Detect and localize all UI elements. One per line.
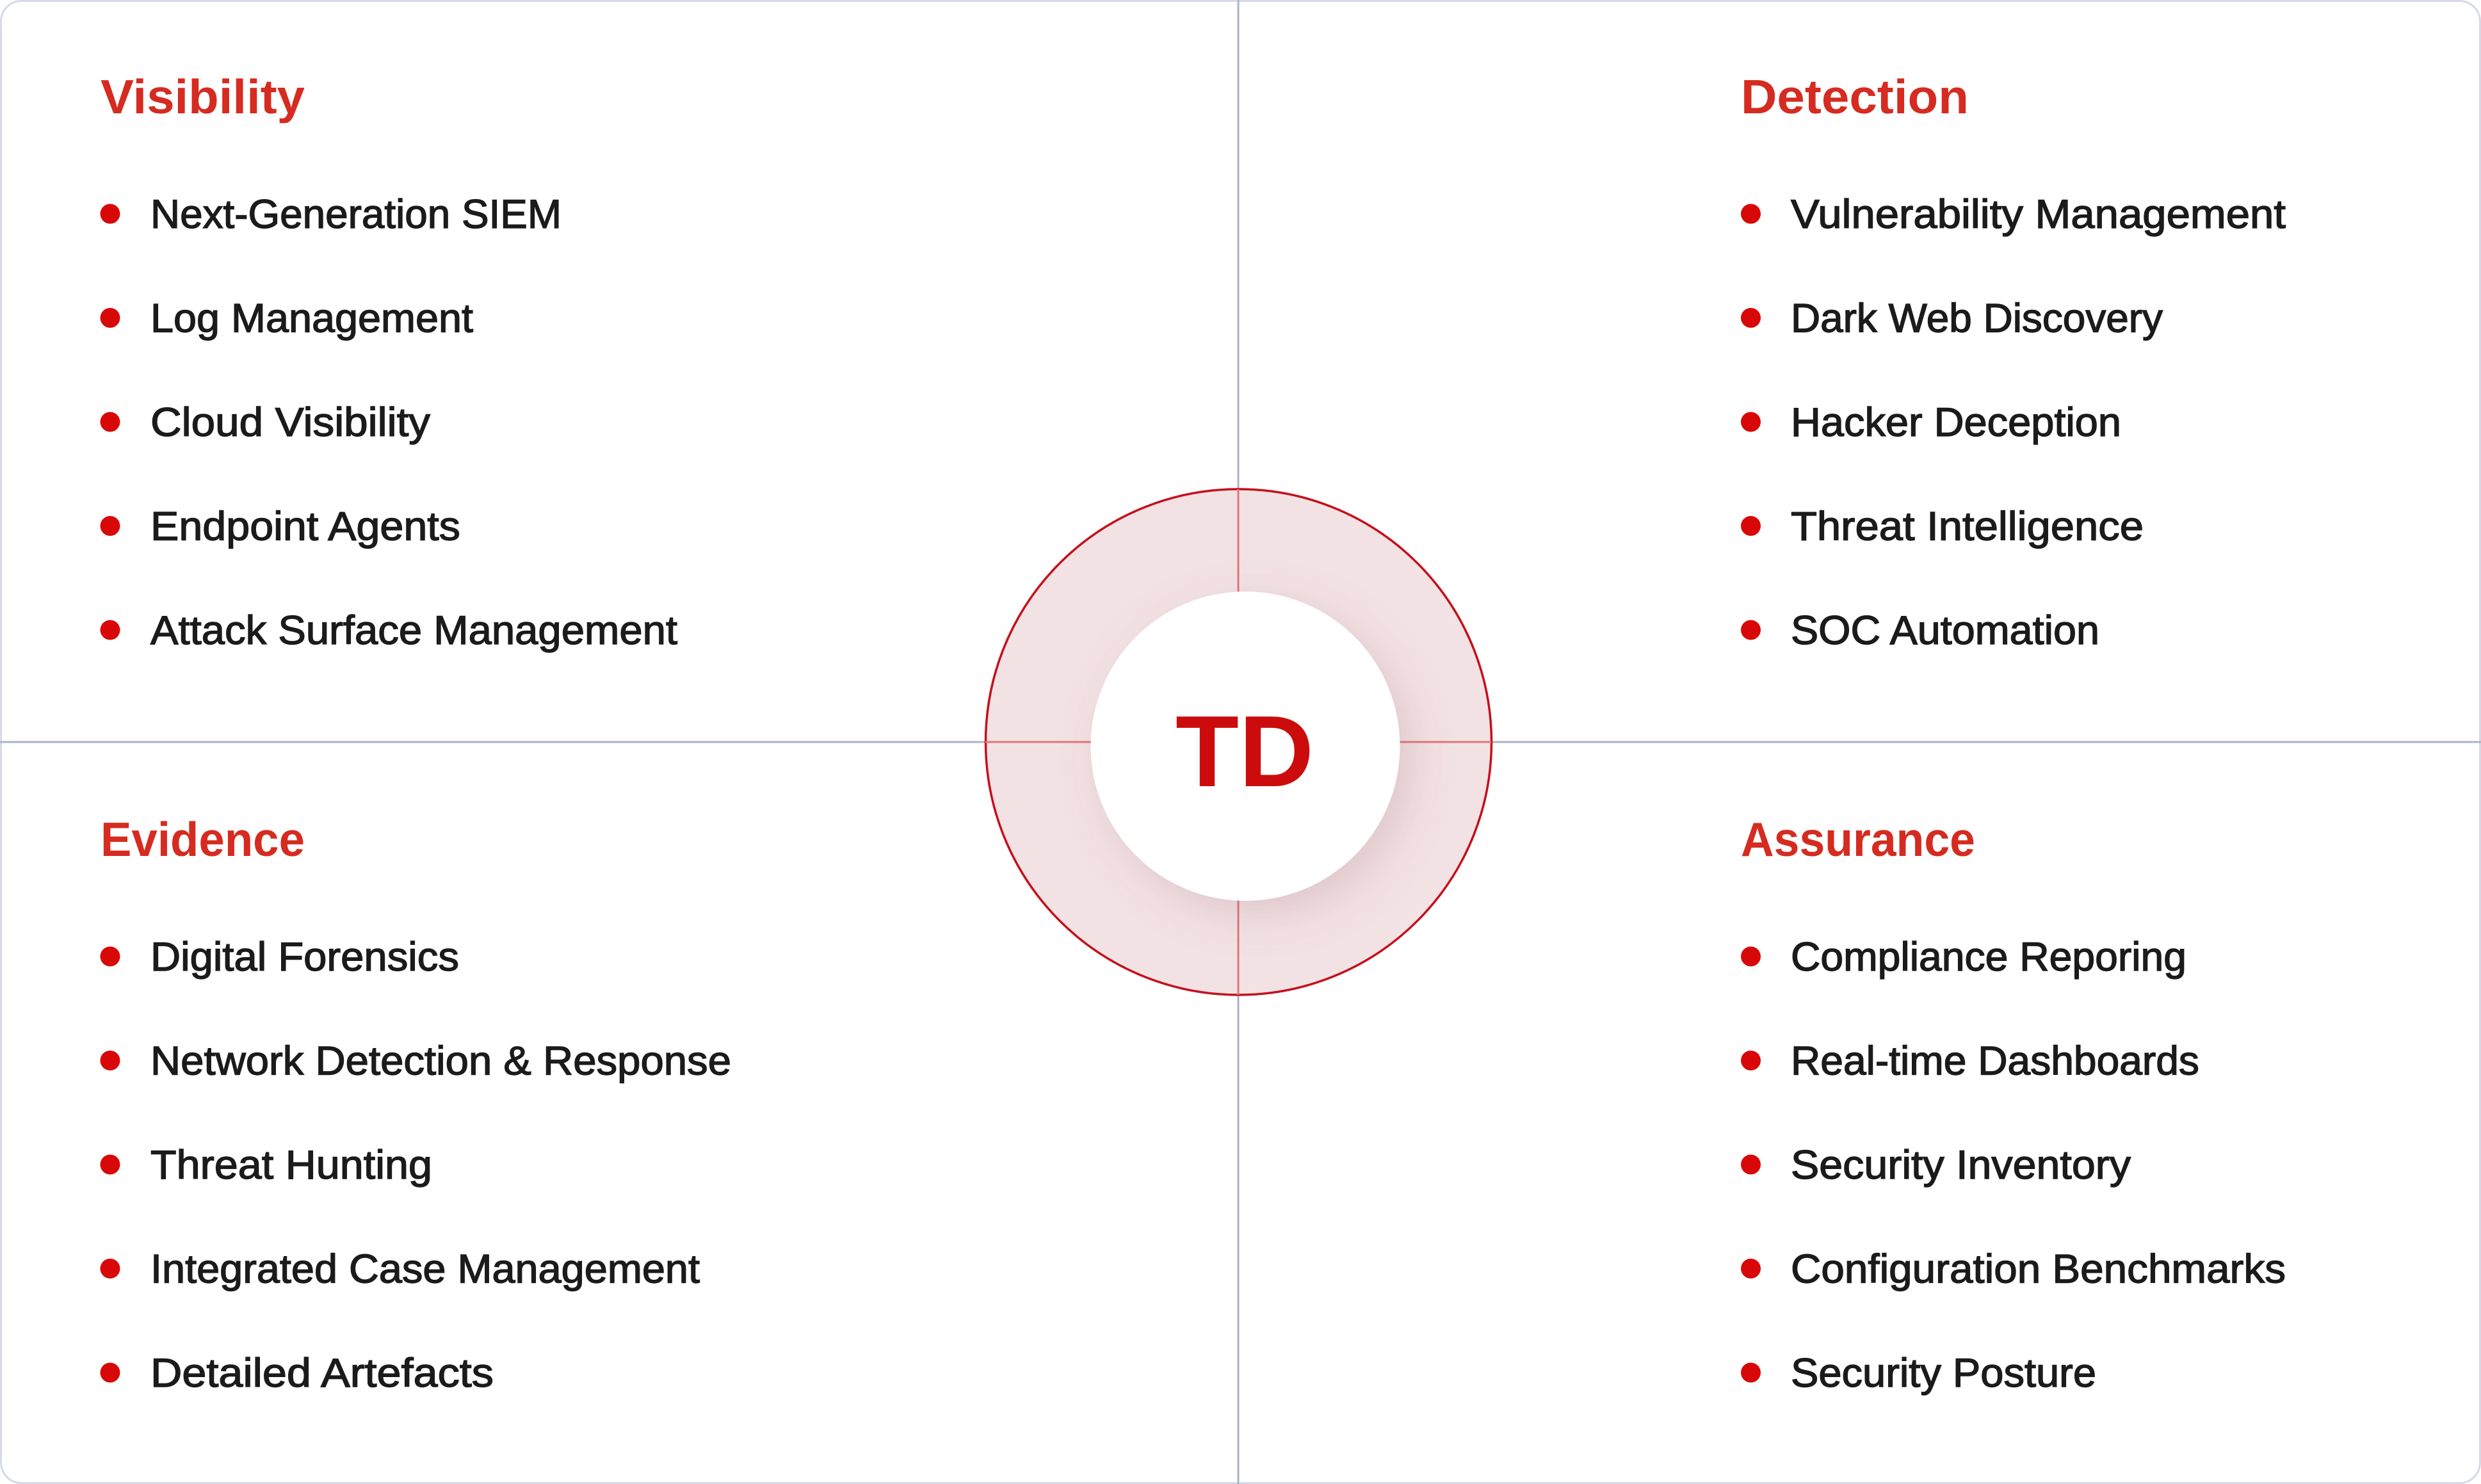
panel: assurance bbox=[1741, 812, 2286, 1396]
item: integrated case management: Integrated Case Management bbox=[150, 1247, 700, 1292]
item: attack surface management: Attack Surface Management bbox=[150, 608, 678, 653]
item: security posture: Security Posture bbox=[1791, 1351, 2096, 1396]
item: compliance reporing: Compliance Reporing bbox=[1791, 935, 2186, 980]
item: hacker deception: Hacker Deception bbox=[1791, 400, 2121, 445]
item: security inventory: Security Inventory bbox=[1791, 1143, 2131, 1188]
item: dark web discovery: Dark Web Discovery bbox=[1791, 296, 2163, 341]
item: vulnerability management: Vulnerability Management bbox=[1791, 192, 2286, 237]
item: threat intelligence: Threat Intelligence bbox=[1791, 504, 2144, 549]
item: real-time dashboards: Real-time Dashboards bbox=[1791, 1038, 2199, 1083]
item: detailed artefacts: Detailed Artefacts bbox=[150, 1351, 494, 1396]
ring crosshair bbox=[985, 489, 1491, 995]
heading: visibility: Visibility bbox=[101, 70, 305, 124]
item: network detection and response: Network Detection & Response bbox=[150, 1038, 731, 1083]
item: next-generation siem: Next-Generation SIEM bbox=[150, 192, 562, 237]
outer ring bbox=[986, 489, 1492, 995]
heading: evidence: Evidence bbox=[101, 812, 305, 866]
panel: visibility bbox=[100, 70, 678, 653]
item: threat hunting: Threat Hunting bbox=[150, 1143, 432, 1188]
item: endpoint agents: Endpoint Agents bbox=[150, 504, 460, 549]
item: digital forensics: Digital Forensics bbox=[150, 935, 459, 980]
item: log management: Log Management bbox=[150, 296, 474, 341]
center emblem bbox=[985, 489, 1492, 995]
panel: detection bbox=[1741, 70, 2286, 653]
item: cloud visibility: Cloud Visibility bbox=[150, 400, 431, 445]
inner circle bbox=[1091, 592, 1400, 901]
panel: evidence bbox=[100, 812, 731, 1396]
heading: detection: Detection bbox=[1741, 70, 1969, 124]
logo text: TD bbox=[1176, 695, 1314, 808]
item: configuration benchmarks: Configuration Benchmarks bbox=[1791, 1247, 2286, 1292]
item: soc automation: SOC Automation bbox=[1791, 608, 2099, 653]
heading: assurance: Assurance bbox=[1741, 812, 1975, 866]
